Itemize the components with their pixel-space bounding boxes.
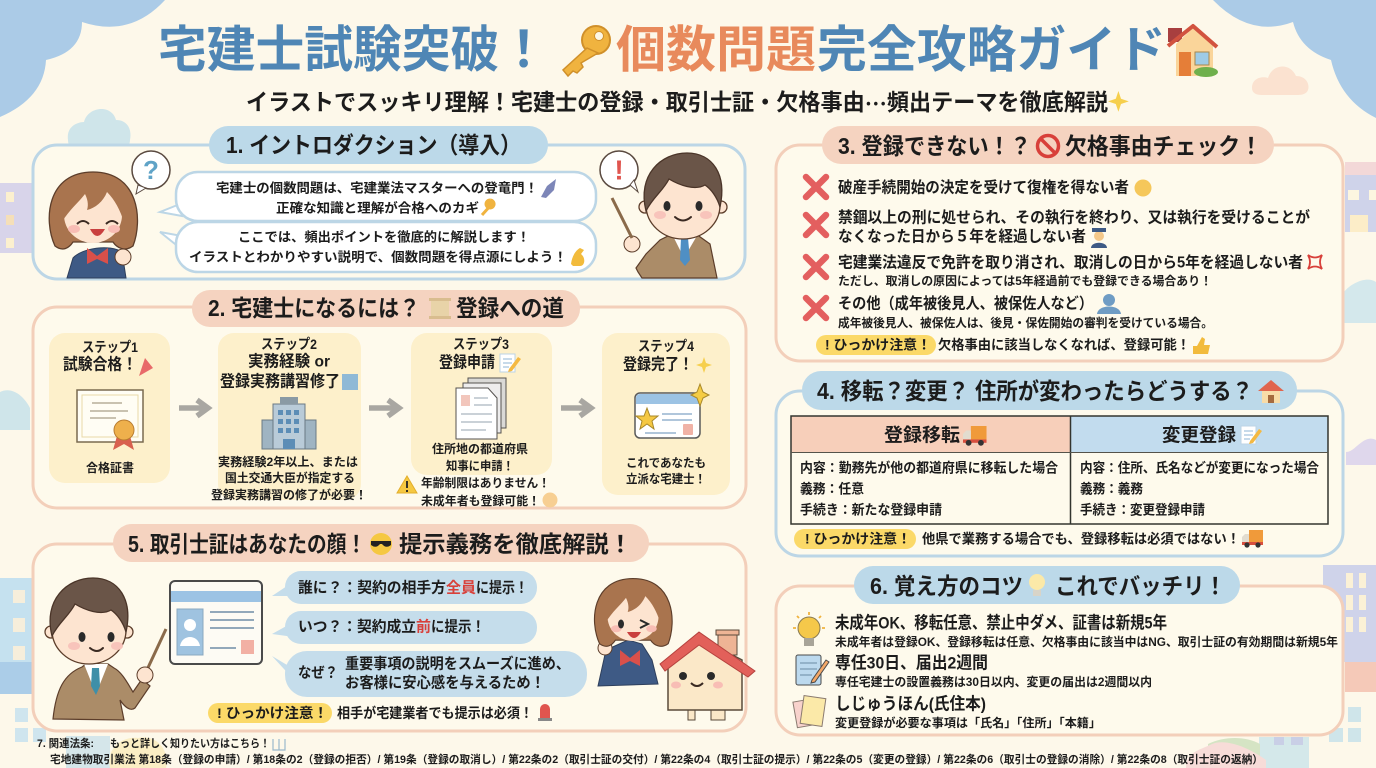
speech bubble 1: 正確な知識と理解が合格へのカギ <box>276 200 479 216</box>
panel 1: introduction <box>33 126 745 279</box>
caution note <box>794 529 1263 549</box>
speech bubble 1: 宅建士の個数問題は、宅建業法マスターへの登竜門！ <box>216 180 538 196</box>
panel 2: road to registration <box>33 290 746 508</box>
icon: scroll <box>429 298 451 319</box>
caution note <box>208 703 552 723</box>
step 2 <box>211 333 367 502</box>
heading 1 <box>209 126 548 164</box>
icon: person silhouette <box>1097 294 1121 314</box>
item 2: 禁錮以上の刑に処せられ、その執行を終わり、又は執行を受けることが <box>838 208 1310 226</box>
comparison table: 内容：勤務先が他の都道府県に移転した場合 <box>800 460 1058 476</box>
step 3 <box>397 333 558 508</box>
icon: party popper <box>139 358 153 376</box>
heading 5 <box>113 524 649 562</box>
bubble: why: お客様に安心感を与えるため！ <box>345 674 545 692</box>
comparison table: 変更登録 <box>1162 424 1236 446</box>
step 2: 登録実務講習の修了が必要！ <box>211 487 367 502</box>
heading 1: 1. イントロダクション（導入） <box>226 132 521 158</box>
icon: office building <box>262 397 316 449</box>
step 2: 実務経験2年以上、または <box>218 454 358 469</box>
character: girl with question: ? <box>143 155 159 185</box>
icon: small key <box>482 200 494 215</box>
icon: certificate <box>77 390 143 450</box>
speech bubble 1 <box>160 172 596 221</box>
title: 完全攻略ガイド <box>817 22 1166 78</box>
icon: key <box>563 26 610 76</box>
item 4: 成年被後見人、被保佐人は、後見・保佐開始の審判を受けている場合。 <box>838 315 1213 330</box>
footer: related articles: 7. 関連法条: <box>37 736 94 750</box>
bubble: who: に提示！ <box>476 580 528 596</box>
comparison table: 義務：任意 <box>800 480 864 496</box>
bubble: why: なぜ？ <box>298 664 338 682</box>
panel 3: disqualification check <box>776 126 1343 361</box>
speech bubble 2: ここでは、頻出ポイントを徹底的に解説します！ <box>238 230 530 244</box>
panel 6: memorization tips <box>776 566 1343 735</box>
caution note: 欠格事由に該当しなくなれば、登録可能！ <box>938 336 1190 352</box>
icon: muscle <box>571 248 584 266</box>
caution note: ! ひっかけ注意！ <box>825 336 931 352</box>
tip 2: 専任宅建士の設置義務は30日以内、変更の届出は2週間以内 <box>835 674 1152 689</box>
icon: license card <box>170 581 262 664</box>
title <box>158 22 1218 78</box>
heading 4 <box>802 371 1297 410</box>
step 2: ステップ2 <box>261 336 317 352</box>
item 4 <box>806 294 1213 330</box>
panel 5: license presentation <box>33 524 755 731</box>
icon: paper sheets <box>793 696 826 728</box>
character: teacher boy: ! <box>614 154 624 186</box>
caution note: ! ひっかけ注意！ <box>217 705 328 721</box>
icon: warning <box>397 476 417 493</box>
icon: memo <box>500 354 521 372</box>
item 1: 破産手続開始の決定を受けて復権を得ない者 <box>838 178 1129 196</box>
icon: baby <box>542 492 558 508</box>
comparison table <box>791 416 1328 524</box>
bubble: who <box>272 571 537 604</box>
heading 4: 4. 移転？変更？ 住所が変わったらどうする？ <box>817 378 1253 404</box>
icon: thumbs up <box>1193 337 1210 354</box>
step 3: 年齢制限はありません！ <box>421 475 550 490</box>
icon: house <box>1168 26 1218 77</box>
item 2 <box>806 208 1310 248</box>
panel 4: address change <box>776 371 1343 556</box>
step 2: 国土交通大臣が指定する <box>225 470 355 485</box>
step 3: ステップ3 <box>453 336 509 352</box>
heading 3: 欠格事由チェック！ <box>1065 133 1262 159</box>
heading 3 <box>822 126 1274 164</box>
icon: siren <box>538 704 552 721</box>
step 1: 試験合格！ <box>63 354 137 374</box>
comparison table: 登録移転 <box>884 424 960 446</box>
step 4: これであなたも <box>626 456 706 470</box>
caution note: 他県で業務する場合でも、登録移転は必須ではない！ <box>922 530 1240 546</box>
heading 5: 5. 取引士証はあなたの顔！ <box>128 531 366 557</box>
tip 3: 変更登録が必要な事項は「氏名」「住所」「本籍」 <box>835 715 1101 730</box>
heading 6 <box>854 566 1240 604</box>
item 2: なくなった日から５年を経過しない者 <box>838 226 1086 246</box>
heading 2: 2. 宅建士になるには？ <box>208 295 420 321</box>
icon: house <box>1258 380 1284 403</box>
icon: memo <box>1241 426 1262 444</box>
icon: light bulb <box>793 612 825 646</box>
tip 1: 未成年OK、移転任意、禁止中ダメ、証書は新規5年 <box>835 612 1167 632</box>
step 2: 実務経験 or <box>248 352 330 370</box>
icon: notepad <box>796 655 829 685</box>
step 3: 登録申請 <box>439 352 495 372</box>
caution note: ! ひっかけ注意！ <box>805 530 911 546</box>
icon: truck <box>963 426 987 446</box>
character: teacher boy <box>600 151 727 278</box>
character: girl <box>594 579 672 686</box>
step 3: 未成年者も登録可能！ <box>421 493 540 508</box>
heading 5: 提示義務を徹底解説！ <box>399 531 632 557</box>
character: teacher boy <box>45 578 166 720</box>
comparison table: 手続き：新たな登録申請 <box>800 502 942 518</box>
step 1: ステップ1 <box>82 339 138 355</box>
icon: small building <box>342 374 358 390</box>
speech bubble 2: イラストとわかりやすい説明で、個数問題を得点源にしよう！ <box>189 250 567 264</box>
step 3: 知事に申請！ <box>446 458 514 473</box>
title: 宅建士試験突破！ <box>158 22 548 78</box>
step 3: 住所地の都道府県 <box>432 441 528 456</box>
tip 2: 専任30日、届出2週間 <box>835 654 988 672</box>
bubble: when <box>272 611 537 644</box>
icon: rocket <box>541 179 556 198</box>
character: house mascot <box>660 630 755 720</box>
item 3: 宅建業法違反で免許を取り消され、取消しの日から5年を経過しない者 <box>838 252 1303 272</box>
arrow 2 <box>369 400 399 416</box>
tip 3 <box>793 694 1101 730</box>
icon: light bulb <box>1029 574 1045 596</box>
footer: related articles <box>37 736 1263 766</box>
item 3: ただし、取消しの原因によっては5年経過前でも登録できる場合あり！ <box>838 273 1212 288</box>
heading 2: 登録への道 <box>456 295 564 321</box>
heading 3: 3. 登録できない！？ <box>838 133 1031 159</box>
bubble: who: 全員 <box>446 578 476 596</box>
tip 1 <box>793 612 1338 649</box>
heading 6: 6. 覚え方のコツ <box>870 573 1023 599</box>
icon: sunglasses face <box>370 533 392 555</box>
icon: sad face <box>1134 180 1152 196</box>
arrow 1 <box>179 400 208 416</box>
subtitle: イラストでスッキリ理解！宅建士の登録・取引士証・欠格事由…頻出テーマを徹底解説 <box>246 85 1108 119</box>
icon: anger mark <box>1308 255 1322 269</box>
bubble: when: に提示！ <box>431 618 485 636</box>
footer: related articles: もっと詳しく知りたい方はこちら！ <box>110 736 270 750</box>
step 4: 立派な宅建士！ <box>626 471 706 486</box>
arrow 3 <box>561 400 591 416</box>
step 4 <box>602 333 730 495</box>
bubble: why: 重要事項の説明をスムーズに進め、 <box>345 654 570 672</box>
bubble: when: 前 <box>416 618 431 636</box>
bubble: why <box>272 651 587 697</box>
step 2: 登録実務講習修了 <box>220 372 340 390</box>
step 1 <box>49 333 170 483</box>
icon: sparkle <box>1108 91 1129 112</box>
caution note: 相手が宅建業者でも提示は必須！ <box>337 705 533 721</box>
icon: prohibited <box>1038 136 1058 156</box>
item 4: その他（成年被後見人、被保佐人など） <box>838 294 1093 312</box>
heading 2 <box>192 290 580 327</box>
comparison table: 手続き：変更登録申請 <box>1080 502 1205 518</box>
bubble: when: いつ？：契約成立 <box>298 618 416 636</box>
comparison table: 義務：義務 <box>1080 480 1143 496</box>
step 4: ステップ4 <box>638 338 694 354</box>
footer: related articles: 宅地建物取引業法 第18条（登録の申請）/ 第18条の2（登録の拒否）/ 第19条（登録の取消し）/ 第22条の2（取引士証の交付）/ 第22条の4（取引士証の提示）/ 第22条の5（変更の登録）/ 第22条の6（取引士の登録の消除）/ 第22条の8（取引士証の返納） <box>50 752 1263 766</box>
title: 個数問題 <box>616 22 816 78</box>
bubble: who: 誰に？：契約の相手方 <box>298 578 446 596</box>
icon: license card <box>635 384 709 438</box>
tip 2 <box>796 654 1152 689</box>
step 1: 合格証書 <box>86 460 134 475</box>
caution note <box>816 335 1210 355</box>
character: girl with question <box>49 151 170 278</box>
icon: book <box>273 739 285 750</box>
item 3 <box>806 252 1322 288</box>
icon: truck <box>1242 530 1263 548</box>
icon: police officer <box>1091 228 1107 248</box>
step 4: 登録完了！ <box>623 354 693 374</box>
comparison table: 内容：住所、氏名などが変更になった場合 <box>1080 460 1319 476</box>
heading 6: これでバッチリ！ <box>1055 573 1226 599</box>
speech bubble 2 <box>160 222 596 272</box>
icon: documents <box>456 378 506 439</box>
icon: sparkle <box>696 357 712 373</box>
tip 3: しじゅうほん(氏住本) <box>835 694 986 714</box>
tip 1: 未成年者は登録OK、登録移転は任意、欠格事由に該当中はNG、取引士証の有効期間は新規5年 <box>835 634 1338 649</box>
